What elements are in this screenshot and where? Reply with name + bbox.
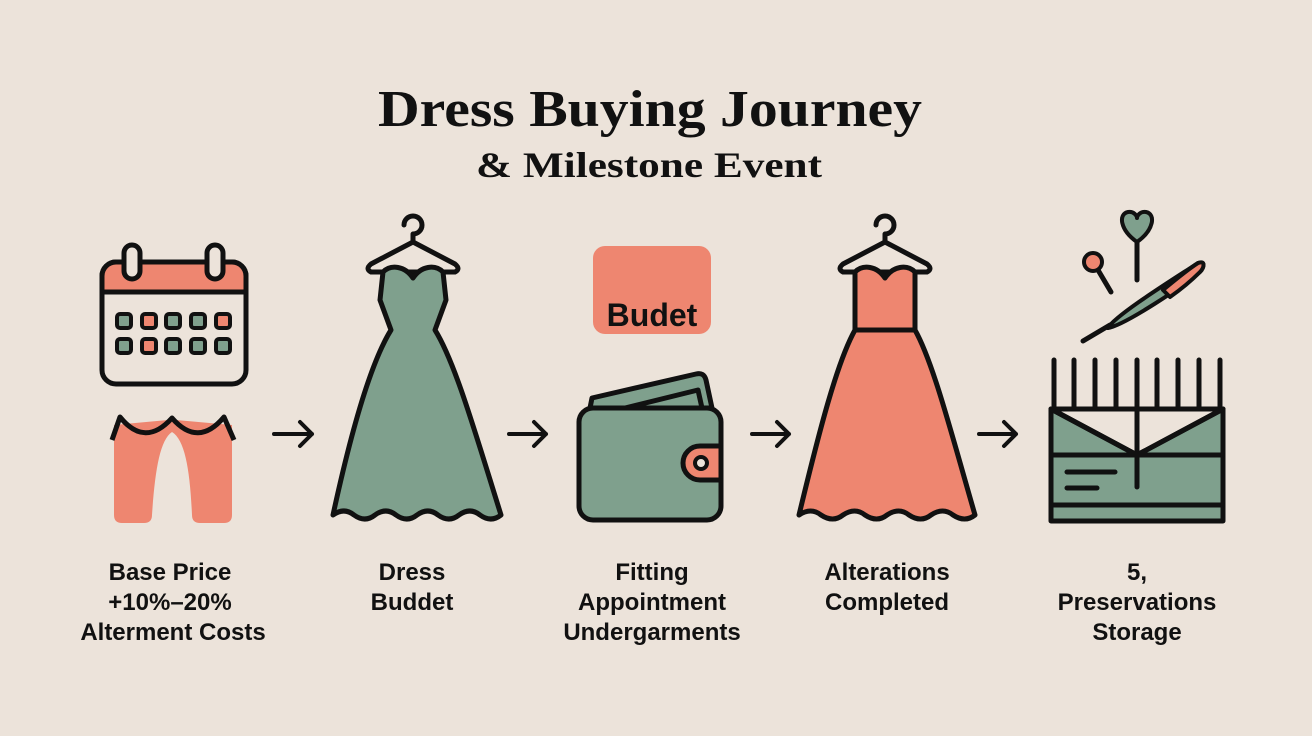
arrow 4: [979, 422, 1016, 446]
icon: green dress: [333, 216, 501, 519]
label 5: Preservations: [1058, 589, 1216, 616]
icon: coral dress: [799, 216, 975, 519]
icon: calendar: [102, 245, 246, 384]
label 3: [563, 559, 741, 646]
arrow 2: [509, 422, 546, 446]
arrow 3: [752, 422, 789, 446]
label 3: Undergarments: [563, 619, 741, 646]
icon: round pin: [1084, 253, 1111, 292]
label 4: [824, 559, 950, 616]
label 1: Alterment Costs: [80, 619, 266, 646]
label 3: Fitting: [615, 559, 689, 586]
label 5: Storage: [1092, 619, 1182, 646]
budget label box: [593, 246, 711, 334]
label 1: +10%–20%: [108, 589, 232, 616]
label 5: [1058, 559, 1216, 646]
title: [378, 81, 922, 185]
label 4: Alterations: [824, 559, 950, 586]
label 2: Dress: [379, 559, 445, 586]
label 1: [80, 559, 266, 646]
label 5: 5,: [1127, 559, 1147, 586]
label 3: Appointment: [578, 589, 726, 616]
icon: pants: [112, 417, 234, 523]
icon: wallet: [579, 374, 721, 520]
label 2: Buddet: [371, 589, 453, 616]
label 1: Base Price: [109, 559, 231, 586]
title: Dress Buying Journey: [378, 81, 922, 138]
icon: pen: [1083, 262, 1204, 341]
budget label box: Budet: [607, 297, 698, 333]
subtitle: & Milestone Event: [476, 145, 822, 185]
arrow 1: [274, 422, 312, 446]
icon: preservation storage: [1051, 212, 1223, 521]
label 4: Completed: [825, 589, 949, 616]
icon: heart pin: [1122, 212, 1152, 280]
label 2: [371, 559, 453, 616]
